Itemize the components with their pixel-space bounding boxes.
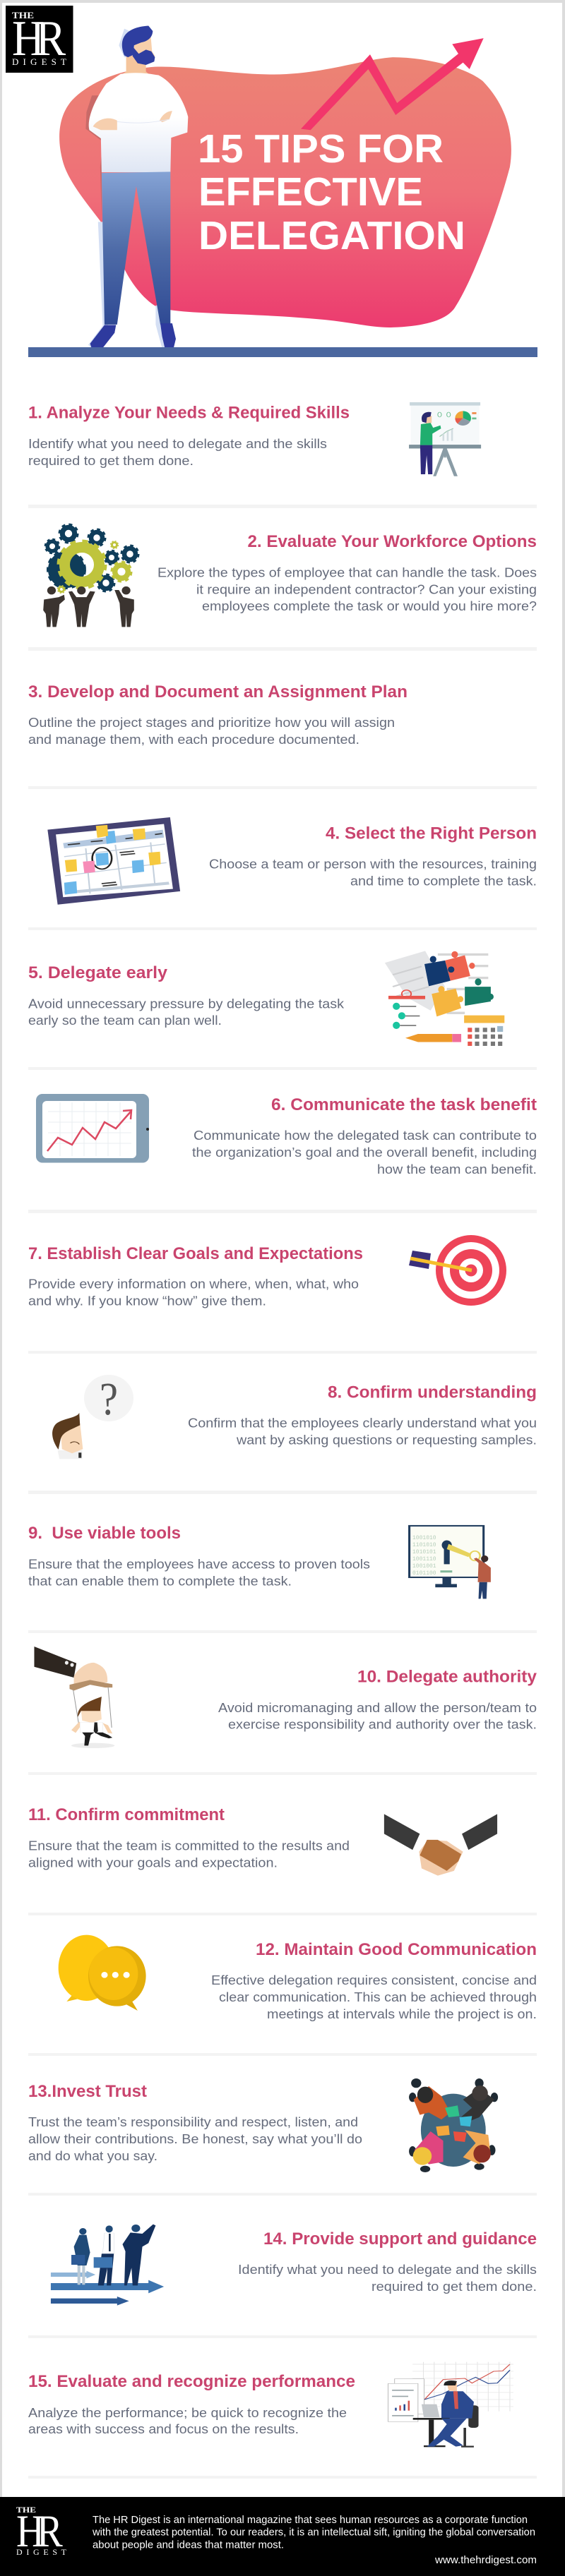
heading: 12. Maintain Good Communication: [256, 1940, 537, 1959]
heading: 9. Use viable tools: [28, 1524, 181, 1543]
body text: [28, 2406, 347, 2436]
heading: 2. Evaluate Your Workforce Options: [247, 532, 537, 551]
tip 7: [28, 1235, 506, 1308]
title: 15 TIPS FOR: [198, 126, 444, 171]
body text: early so the team can plan well.: [28, 1013, 222, 1028]
icon: target with dart: [409, 1235, 506, 1306]
tip 3: [28, 682, 408, 747]
growth arrow: [301, 38, 484, 130]
body text: Ensure that the team is committed to the results and: [28, 1839, 350, 1853]
footer logo: HR: [16, 2506, 63, 2557]
icon: monitor with key: [410, 1526, 491, 1599]
body text: [28, 997, 345, 1028]
body text: [28, 716, 395, 747]
footer: [0, 2497, 565, 2576]
icon: team around table with puzzle: [409, 2078, 498, 2172]
tip 13: [28, 2078, 498, 2172]
body text: Explore the types of employee that can handle the task. Does: [157, 566, 537, 580]
heading: 10. Delegate authority: [357, 1667, 537, 1687]
body text: required to get them done.: [28, 454, 194, 468]
body text: the organization’s goal and the overall benefit, including: [192, 1145, 537, 1160]
body text: [238, 2263, 537, 2294]
body text: Avoid unnecessary pressure by delegating the task: [28, 997, 345, 1011]
tip 8: [52, 1373, 537, 1459]
body text: [28, 437, 327, 468]
body text: [28, 1557, 370, 1588]
icon: gears and team: [43, 524, 138, 627]
body text: [28, 2115, 362, 2163]
tip 2: [43, 524, 537, 627]
title: DELEGATION: [198, 213, 465, 258]
body text: and manage them, with each procedure documented.: [28, 733, 359, 747]
body text: Confirm that the employees clearly understand what you: [188, 1416, 537, 1430]
icon: business team on arrows: [51, 2225, 164, 2306]
heading: 3. Develop and Document an Assignment Plan: [28, 682, 408, 702]
icon: monitor with key: 1001010: [412, 1535, 436, 1541]
body text: how the team can benefit.: [377, 1162, 537, 1176]
body text: want by asking questions or requesting samples.: [236, 1433, 537, 1447]
icon: puppet on strings: [34, 1647, 114, 1748]
tip 9: [28, 1524, 491, 1599]
body text: Choose a team or person with the resources, training: [209, 857, 537, 871]
body text: and time to complete the task.: [350, 874, 537, 888]
icon: presenter at whiteboard: [409, 402, 481, 476]
body text: [157, 566, 537, 613]
tip 5: [28, 951, 504, 1046]
body text: Ensure that the employees have access to proven tools: [28, 1557, 370, 1571]
footer logo: THE: [16, 2505, 36, 2515]
tip 11: [28, 1805, 497, 1876]
body text: exercise responsibility and authority over the task.: [228, 1718, 537, 1732]
body text: Outline the project stages and prioritize how you will assign: [28, 716, 395, 730]
body text: aligned with your goals and expectation.: [28, 1856, 278, 1870]
logo: The HR Digest: [6, 6, 73, 73]
body text: meetings at intervals while the project is on.: [267, 2007, 537, 2021]
body text: Effective delegation requires consistent, concise and: [211, 1973, 537, 1987]
title: EFFECTIVE: [198, 169, 423, 215]
footer logo: DIGEST: [16, 2547, 67, 2557]
tip 14: [51, 2225, 537, 2306]
body text: and do what you say.: [28, 2149, 157, 2163]
body text: allow their contributions. Be honest, say what you’ll do: [28, 2132, 362, 2146]
heading: 7. Establish Clear Goals and Expectations: [28, 1244, 363, 1263]
tip 6: [36, 1094, 537, 1176]
heading: 6. Communicate the task benefit: [271, 1095, 537, 1114]
heading: 13.Invest Trust: [28, 2082, 147, 2101]
logo: The HR Digest: HR: [12, 11, 66, 66]
heading: 14. Provide support and guidance: [263, 2229, 537, 2249]
body text: [28, 1277, 359, 1308]
body text: Avoid micromanaging and allow the person/team to: [218, 1701, 537, 1715]
icon: puzzle pieces and calendar: [385, 951, 504, 1046]
footer description: with the greatest potential. To our readers, it is an intellectual sift, igniting the global conversation: [92, 2527, 535, 2538]
body text: Identify what you need to delegate and the skills: [28, 437, 327, 451]
body text: Analyze the performance; be quick to recognize the: [28, 2406, 347, 2420]
icon: confused man with question mark: [52, 1373, 133, 1459]
body text: Trust the team’s responsibility and respect, listen, and: [28, 2115, 358, 2129]
body text: required to get them done.: [371, 2280, 537, 2294]
body text: [209, 857, 537, 888]
icon: monitor with key: 1001001: [412, 1563, 436, 1570]
tip 4: [47, 817, 537, 905]
footer description: about people and ideas that matter most.: [93, 2539, 284, 2551]
body text: and why. If you know “how” give them.: [28, 1294, 266, 1308]
tip 10: [34, 1647, 537, 1748]
body text: Communicate how the delegated task can contribute to: [194, 1128, 537, 1143]
icon: monitor with key: 1001110: [412, 1556, 436, 1563]
footer description: [92, 2515, 535, 2551]
body text: [211, 1973, 537, 2021]
logo: The HR Digest: THE: [12, 10, 34, 20]
icon: monitor with key: 0101100: [412, 1570, 436, 1577]
icon: monitor with key: 1101010: [412, 1542, 436, 1548]
body text: Provide every information on where, when, what, who: [28, 1277, 359, 1292]
icon: handshake: [384, 1814, 497, 1876]
heading: 1. Analyze Your Needs & Required Skills: [28, 404, 350, 422]
body text: [188, 1416, 537, 1447]
body text: employees complete the task or would you hire more?: [202, 599, 537, 613]
ground bar: [28, 347, 537, 357]
icon: analyst at desk with charts: [388, 2362, 513, 2447]
heading: 15. Evaluate and recognize performance: [28, 2372, 355, 2391]
website url: www.thehrdigest.com: [434, 2555, 537, 2566]
icon: confused man with question mark: ?: [100, 1373, 118, 1425]
heading: 11. Confirm commitment: [28, 1805, 225, 1824]
tip 15: [28, 2362, 513, 2447]
icon: planning board with sticky notes: [47, 817, 180, 905]
gradient blob: [59, 57, 511, 327]
body text: it require an independent contractor? Can your existing: [196, 583, 537, 597]
icon: monitor with key: 1010101: [412, 1549, 436, 1555]
body text: [218, 1701, 537, 1732]
tip 12: [59, 1935, 537, 2021]
body text: clear communication. This can be achieved through: [219, 1990, 537, 2004]
heading: 4. Select the Right Person: [326, 824, 537, 843]
body text: areas with success and focus on the results.: [28, 2422, 299, 2436]
body text: that can enable them to complete the task.: [28, 1574, 292, 1588]
icon: speech bubbles: [59, 1935, 146, 2011]
logo: The HR Digest: DIGEST: [12, 56, 66, 67]
body text: Identify what you need to delegate and the skills: [238, 2263, 537, 2277]
tip 1: [28, 402, 481, 476]
title: [198, 126, 465, 258]
footer description: The HR Digest is an international magazine that sees human resources as a corporate function: [93, 2515, 528, 2526]
standing man: [85, 26, 188, 352]
heading: 5. Delegate early: [28, 963, 168, 982]
icon: tablet with rising chart: [36, 1094, 149, 1163]
header illustration: blob, growth arrow and standing man: [59, 26, 511, 352]
body text: [28, 1839, 350, 1870]
body text: [192, 1128, 537, 1176]
heading: 8. Confirm understanding: [328, 1383, 537, 1402]
